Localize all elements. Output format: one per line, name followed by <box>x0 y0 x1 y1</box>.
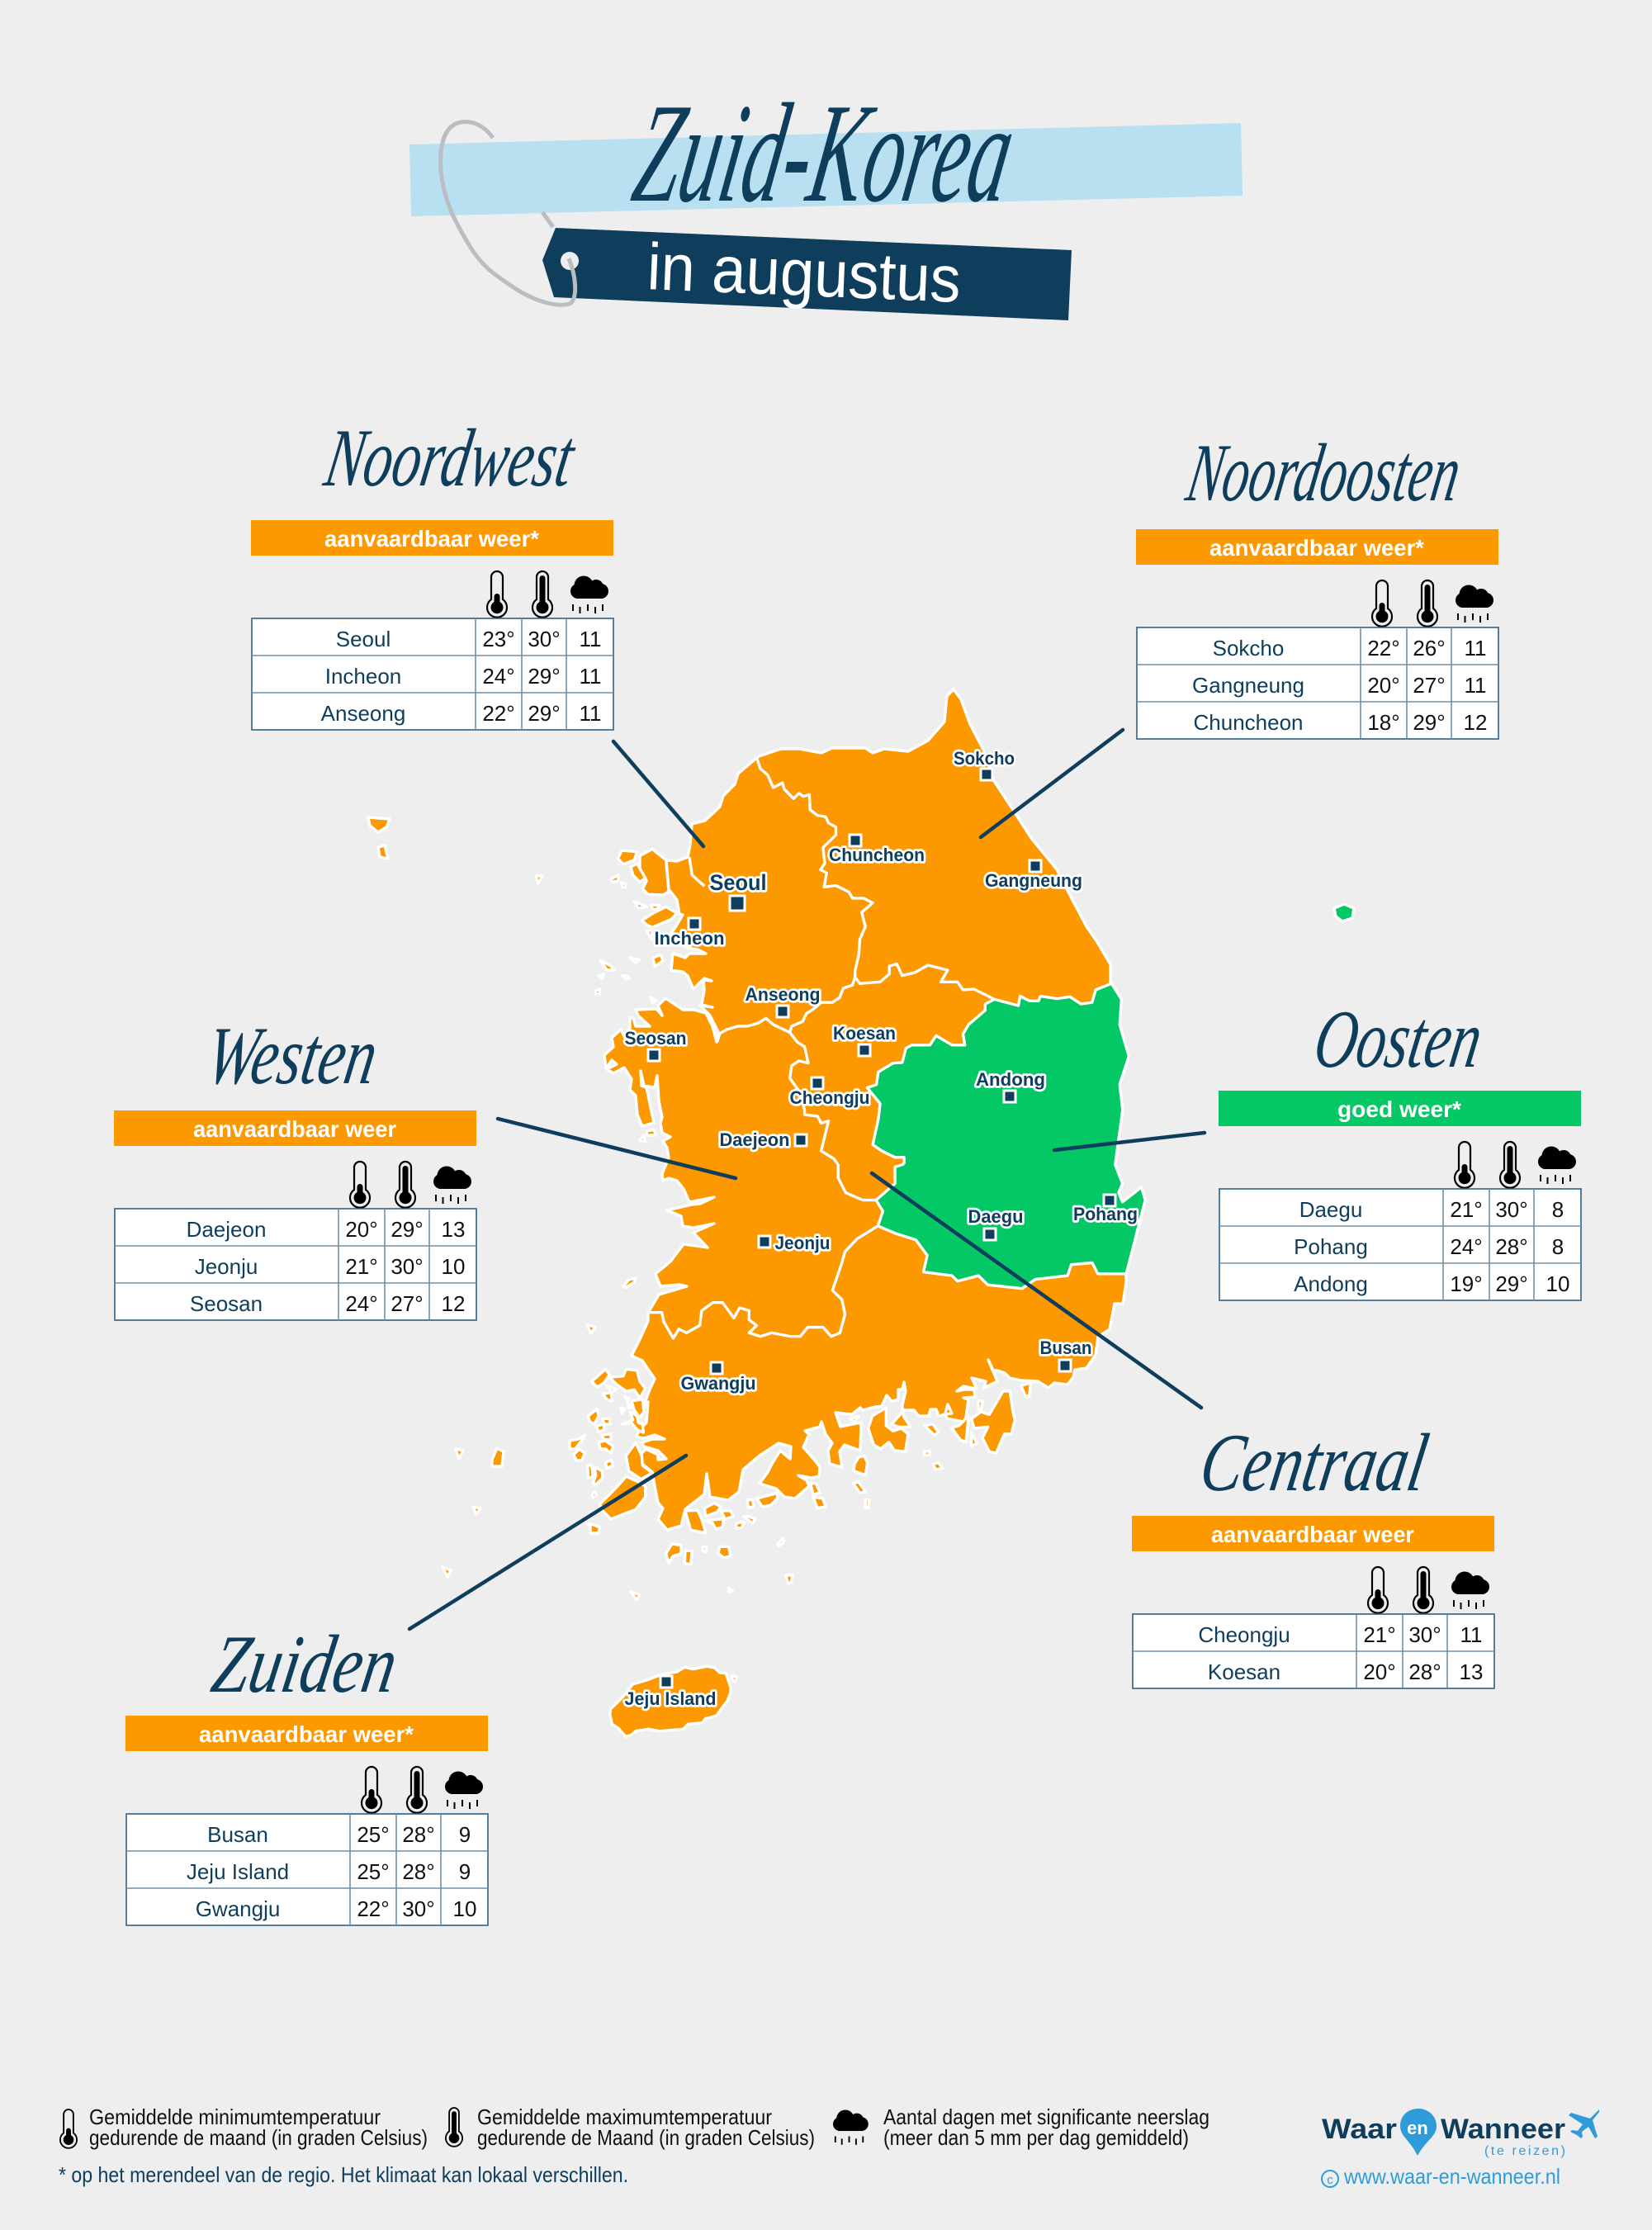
table: 10 <box>442 1254 465 1279</box>
legend text max: Gemiddelde maximumtemperatuur <box>477 2105 772 2129</box>
leader line westen <box>498 1119 736 1178</box>
table: Seosan <box>190 1291 263 1316</box>
leader line centraal <box>872 1173 1201 1408</box>
weather bar <box>251 520 613 556</box>
icon: min thermometer <box>60 2109 77 2148</box>
panel: zuiden <box>125 1618 488 1925</box>
table: 29° <box>391 1217 424 1242</box>
tag hole <box>561 252 579 270</box>
table: 21° <box>1450 1197 1483 1222</box>
green east north <box>867 983 1129 1164</box>
island west coast <box>623 1278 636 1287</box>
bar text: aanvaardbaar weer <box>193 1116 396 1142</box>
table: 29° <box>1495 1271 1528 1296</box>
legend text rain: (meer dan 5 mm per dag gemiddeld) <box>883 2125 1189 2150</box>
city labels: Jeonju <box>774 1233 831 1253</box>
border west south <box>650 1226 878 1338</box>
city markers <box>648 769 1115 1688</box>
city labels: Koesan <box>833 1023 896 1044</box>
title block <box>409 75 1243 320</box>
city labels: Jeju Island <box>624 1688 717 1709</box>
city labels: Busan <box>1040 1338 1091 1358</box>
green east south <box>876 1164 1145 1289</box>
table: 8 <box>1552 1234 1564 1259</box>
icon: max thermometer <box>446 2108 462 2147</box>
leader line noordwest <box>613 741 703 846</box>
logo text wanneer: Wanneer <box>1441 2114 1565 2145</box>
table: 8 <box>1552 1197 1564 1222</box>
table: 18° <box>1367 710 1400 735</box>
table: Cheongju <box>1198 1622 1290 1647</box>
table: Jeju Island <box>187 1859 289 1884</box>
table: 30° <box>402 1896 435 1921</box>
table: 22° <box>357 1896 390 1921</box>
orange mainland <box>604 689 1126 1530</box>
table: 22° <box>482 701 515 726</box>
table: 27° <box>1413 673 1446 698</box>
table: 10 <box>1546 1271 1569 1296</box>
table: 28° <box>402 1859 435 1884</box>
heading: Westen <box>200 1010 385 1101</box>
weather bar <box>1132 1516 1494 1551</box>
city labels: Andong <box>976 1069 1045 1090</box>
logo tagline: (te reizen) <box>1484 2144 1565 2158</box>
table <box>1133 1614 1494 1688</box>
icons <box>1368 1567 1489 1613</box>
table: 30° <box>528 627 561 651</box>
outlying islands <box>368 817 1354 1577</box>
panel: centraal <box>1132 1417 1494 1688</box>
weather bar <box>125 1716 488 1751</box>
table: 30° <box>1495 1197 1528 1222</box>
city labels: Chuncheon <box>829 845 925 865</box>
table <box>1219 1189 1581 1300</box>
icons <box>487 571 608 618</box>
table: 28° <box>1408 1659 1441 1684</box>
Jeju island <box>610 1666 737 1736</box>
table: 25° <box>357 1859 390 1884</box>
table: 26° <box>1413 636 1446 660</box>
table <box>1137 627 1498 739</box>
table: 12 <box>442 1291 465 1316</box>
table: 12 <box>1464 710 1487 735</box>
table: Chuncheon <box>1194 710 1303 735</box>
city labels: Gwangju <box>680 1373 756 1394</box>
table: 13 <box>1460 1659 1483 1684</box>
islands south <box>811 1383 1030 1508</box>
table: Gwangju <box>196 1896 280 1921</box>
icon: rain cloud <box>833 2109 869 2145</box>
city labels: Seosan <box>624 1028 687 1049</box>
table: Daejeon <box>187 1217 266 1242</box>
table: 24° <box>482 664 515 689</box>
leader line noordoosten <box>981 730 1123 837</box>
table: Seoul <box>336 627 391 651</box>
icons <box>1372 580 1493 627</box>
table: 22° <box>1367 636 1400 660</box>
city labels: Daejeon <box>720 1129 789 1150</box>
table: Daegu <box>1299 1197 1362 1222</box>
table: 9 <box>459 1859 471 1884</box>
city labels: Cheongju <box>789 1087 870 1108</box>
table: 20° <box>1363 1659 1396 1684</box>
table: 19° <box>1450 1271 1483 1296</box>
table: 24° <box>1450 1234 1483 1259</box>
copyright mark: c <box>1327 2173 1333 2187</box>
city labels: Daegu <box>968 1206 1024 1227</box>
table: 11 <box>580 701 601 726</box>
icons <box>1455 1142 1576 1188</box>
table: 21° <box>1363 1622 1396 1647</box>
website url: www.waar-en-wanneer.nl <box>1343 2164 1560 2189</box>
map of South Korea <box>368 689 1354 1736</box>
table: 11 <box>1460 1622 1483 1647</box>
legend text min: gedurende de maand (in graden Celsius) <box>89 2125 428 2150</box>
table: 30° <box>391 1254 424 1279</box>
heading: Noordoosten <box>1181 427 1468 518</box>
border central west <box>790 1033 838 1164</box>
table: Sokcho <box>1213 636 1284 660</box>
table: 20° <box>345 1217 378 1242</box>
legend <box>59 2105 1209 2187</box>
table: 10 <box>453 1896 476 1921</box>
bar text: goed weer* <box>1337 1096 1461 1122</box>
table <box>115 1209 476 1320</box>
city labels: Incheon <box>654 928 725 949</box>
table <box>126 1814 488 1925</box>
panel: oosten <box>1219 993 1581 1300</box>
table: 28° <box>402 1822 435 1847</box>
map north part <box>717 758 1129 1164</box>
city labels: Pohang <box>1073 1204 1138 1224</box>
copyright mark <box>1322 2171 1338 2187</box>
islands west <box>640 1129 656 1142</box>
border central west south <box>838 1164 876 1200</box>
table: 20° <box>1367 673 1400 698</box>
leader line zuiden <box>409 1456 686 1629</box>
table: 29° <box>528 664 561 689</box>
map south part <box>650 1164 1145 1338</box>
bar text: aanvaardbaar weer <box>1211 1522 1414 1547</box>
table: 21° <box>345 1254 378 1279</box>
bar text: aanvaardbaar weer* <box>324 526 539 552</box>
city labels <box>624 748 1138 1709</box>
table: 25° <box>357 1822 390 1847</box>
table: Busan <box>207 1822 268 1847</box>
table: 27° <box>391 1291 424 1316</box>
table: 29° <box>1413 710 1446 735</box>
table: 24° <box>345 1291 378 1316</box>
leader line oosten <box>1054 1133 1205 1150</box>
table: 23° <box>482 627 515 651</box>
city labels: Seoul <box>710 870 766 895</box>
logo <box>1322 2109 1599 2189</box>
icons <box>350 1162 471 1208</box>
panel: noordwest <box>251 412 613 730</box>
legend text rain: Aantal dagen met significante neerslag <box>883 2105 1209 2129</box>
legend text max: gedurende de Maand (in graden Celsius) <box>477 2125 815 2150</box>
panel: noordoosten <box>1136 427 1498 739</box>
weather bar <box>1219 1091 1581 1126</box>
table: 30° <box>1408 1622 1441 1647</box>
logo en: en <box>1407 2118 1428 2138</box>
heading: Centraal <box>1194 1417 1435 1508</box>
table: Anseong <box>321 701 405 726</box>
icon: airplane <box>1569 2109 1599 2138</box>
border northwest central west <box>717 978 855 1042</box>
heading: Noordwest <box>318 412 583 504</box>
subtitle text: in augustus <box>646 230 963 316</box>
heading: Zuiden <box>206 1618 405 1710</box>
table: 11 <box>580 664 601 689</box>
table: 11 <box>580 627 601 651</box>
islands southwest <box>570 1369 793 1600</box>
bar text: aanvaardbaar weer* <box>1209 535 1424 561</box>
city labels: Gangneung <box>985 870 1082 891</box>
title ribbon <box>409 123 1243 216</box>
table: 13 <box>442 1217 465 1242</box>
table: 29° <box>528 701 561 726</box>
legend text rain <box>883 2105 1209 2150</box>
logo pin <box>1400 2109 1437 2156</box>
table: Incheon <box>325 664 401 689</box>
icons <box>362 1767 483 1813</box>
city labels: Anseong <box>745 984 821 1005</box>
city labels: Sokcho <box>954 748 1015 769</box>
table: 11 <box>1465 673 1486 698</box>
heading: Oosten <box>1308 993 1489 1085</box>
tag string <box>441 122 575 305</box>
footnote: * op het merendeel van de regio. Het klimaat kan lokaal verschillen. <box>59 2162 628 2187</box>
islands northwest <box>595 849 704 1003</box>
table: Jeonju <box>195 1254 258 1279</box>
table <box>252 618 613 730</box>
region borders north <box>757 758 994 999</box>
seoul inlet <box>689 857 704 886</box>
panel: westen <box>114 1010 476 1320</box>
weather bar <box>114 1110 476 1146</box>
bar text: aanvaardbaar weer* <box>199 1721 414 1747</box>
legend text min: Gemiddelde minimumtemperatuur <box>89 2105 381 2129</box>
table: 28° <box>1495 1234 1528 1259</box>
table: Koesan <box>1208 1659 1280 1684</box>
table: 11 <box>1465 636 1486 660</box>
table: Pohang <box>1294 1234 1368 1259</box>
table: 9 <box>459 1822 471 1847</box>
table: Gangneung <box>1192 673 1304 698</box>
table: Andong <box>1294 1271 1368 1296</box>
subtitle tag <box>542 228 1072 320</box>
weather bar <box>1136 529 1498 565</box>
logo text waar: Waar <box>1322 2114 1397 2145</box>
title text: Zuid-Korea <box>623 75 1025 232</box>
legend text max <box>477 2105 815 2150</box>
legend text min <box>89 2105 428 2150</box>
